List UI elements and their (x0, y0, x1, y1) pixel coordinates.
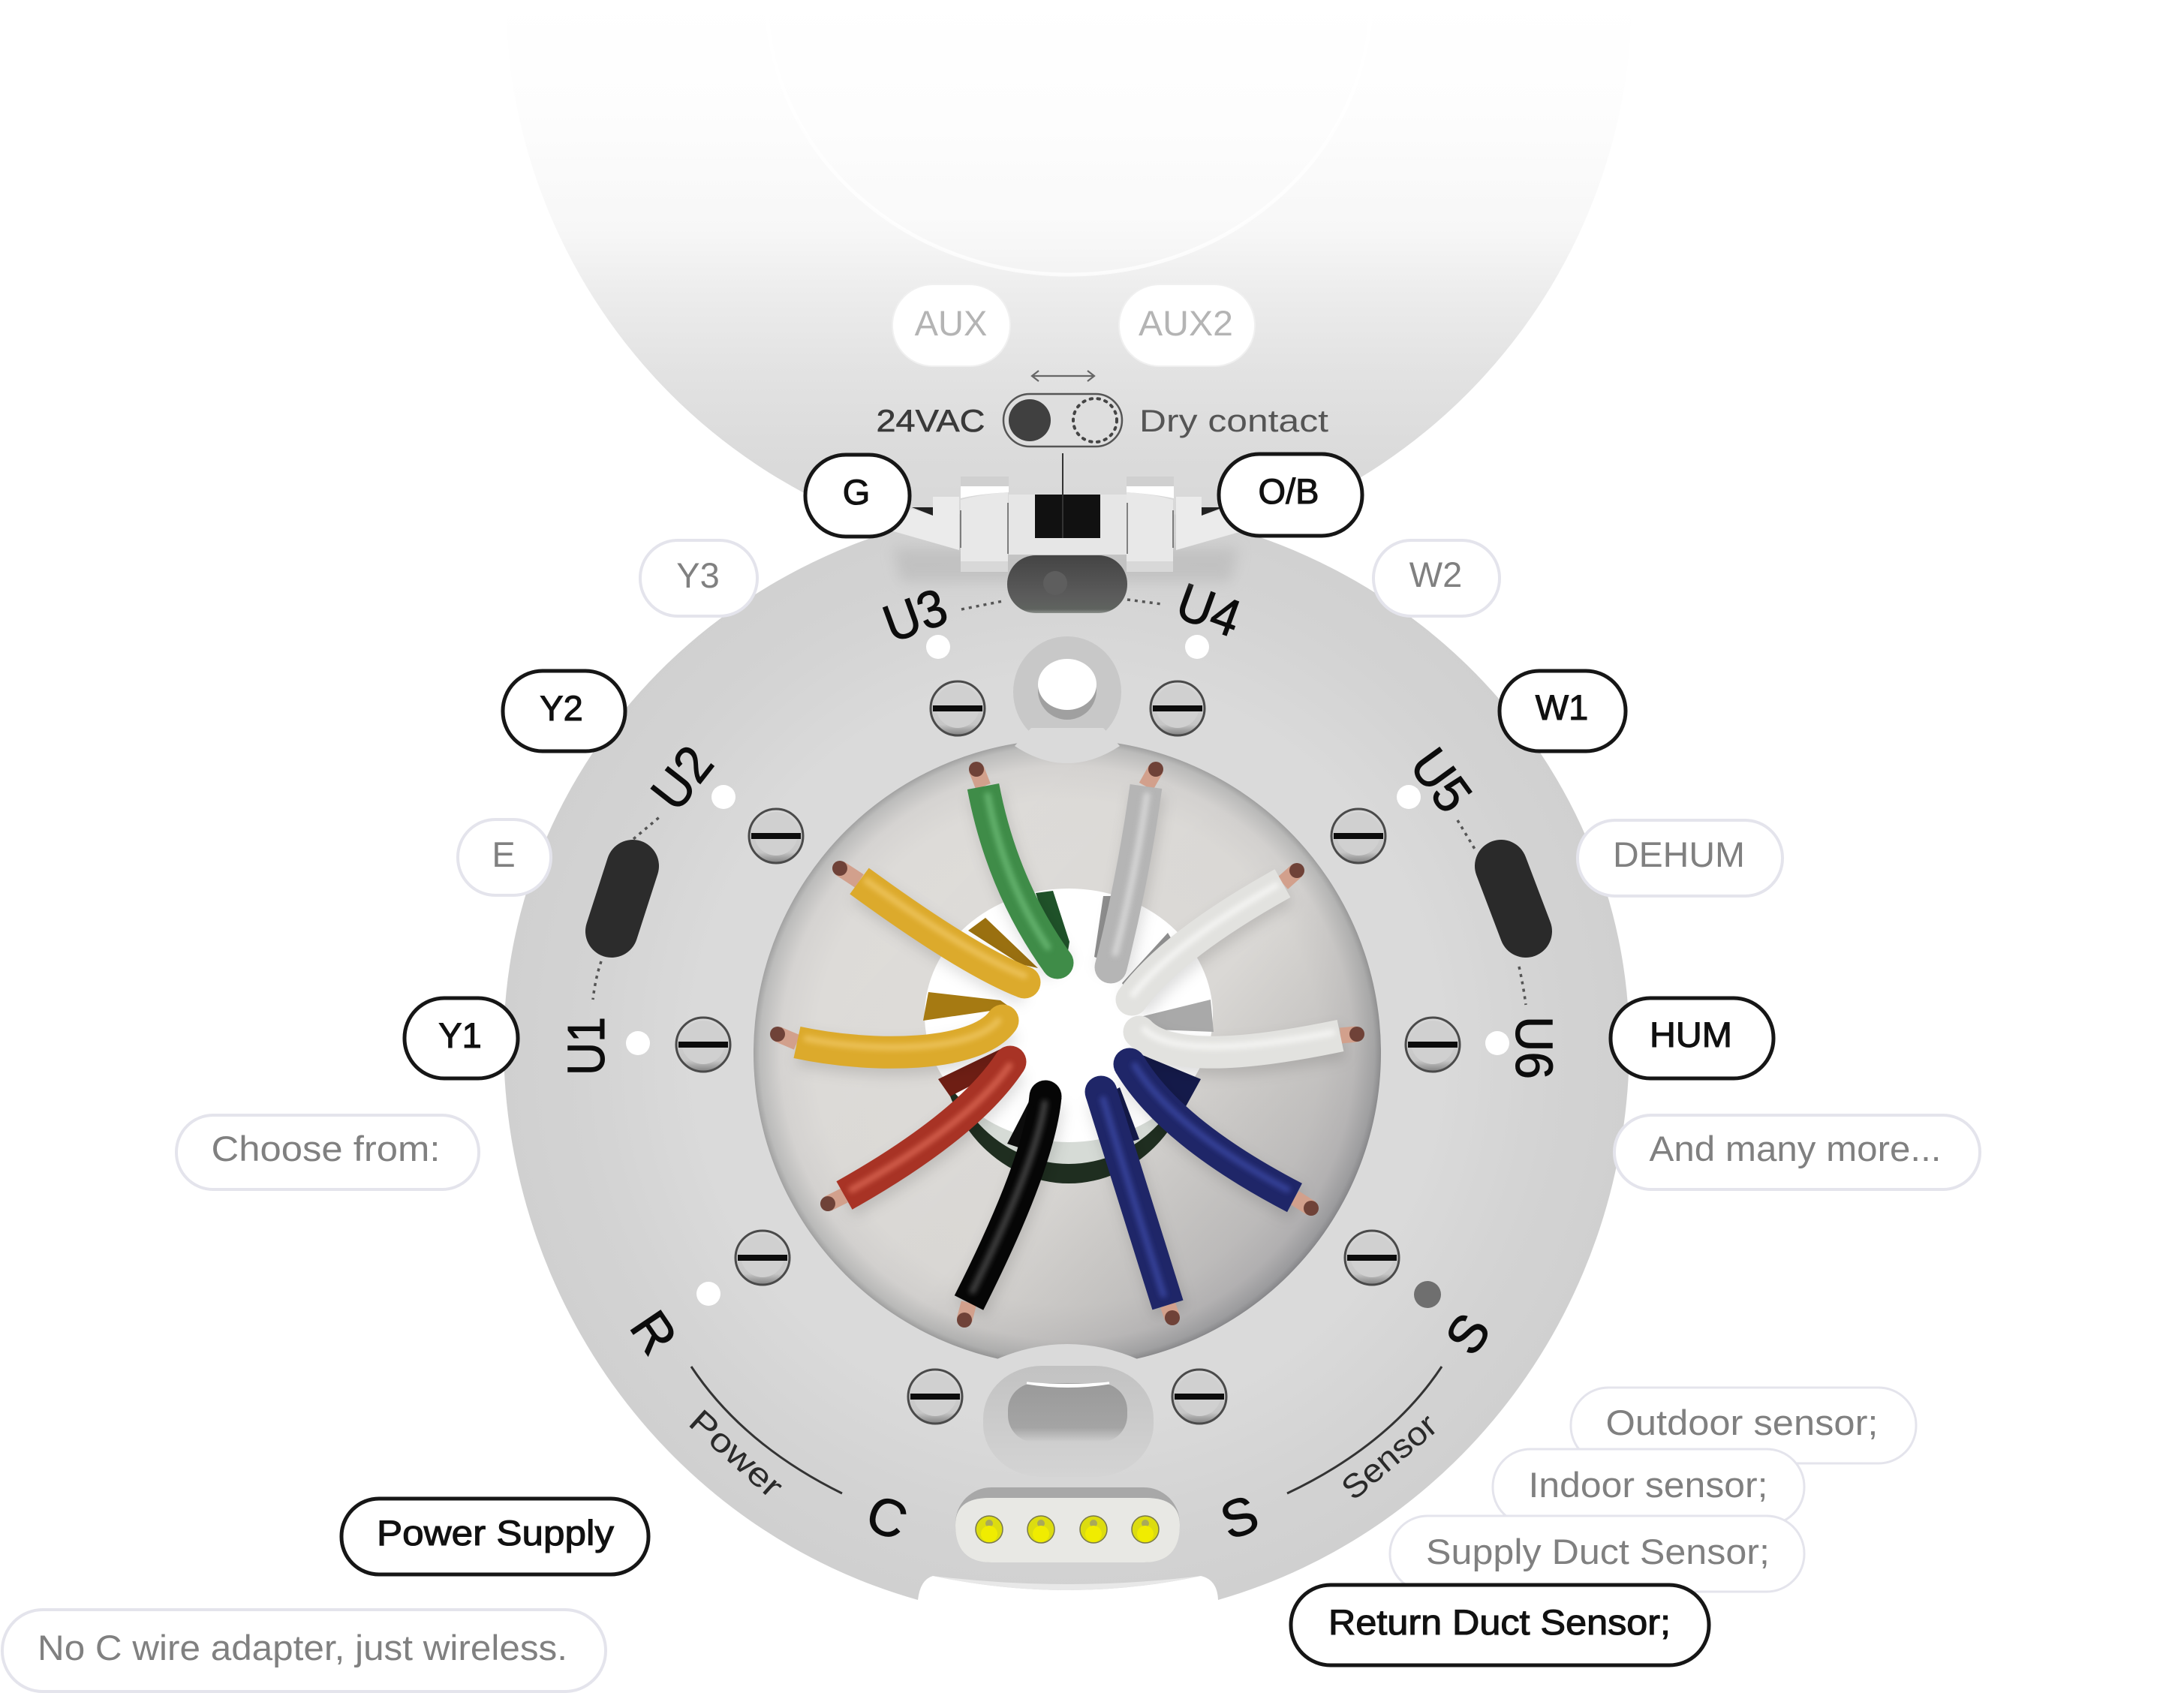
dark latch slot (1007, 555, 1127, 613)
pill AUX (892, 284, 1010, 366)
barrel seams (961, 503, 1173, 554)
pill DEHUM: DEHUM (1613, 834, 1745, 874)
pill And many more (1614, 1115, 1980, 1189)
pill Y3: Y3 (676, 555, 720, 595)
pill W1 (1500, 671, 1626, 751)
terminal indicator dots (626, 635, 1509, 1308)
pill E (458, 819, 551, 895)
left slot (961, 477, 1009, 487)
wire cavity (754, 739, 1381, 1367)
right arm (1176, 497, 1250, 550)
sensor group label: Sensor (1334, 1406, 1445, 1507)
hinge assembly (886, 453, 1250, 613)
pill Choose from: Choose from: (212, 1129, 440, 1168)
pill Y3 (640, 540, 757, 616)
wire stubs behind the opening (923, 891, 1214, 1148)
terminal labels on plate: U3 (876, 577, 955, 654)
pill Indoor sensor (1493, 1449, 1804, 1525)
central opening (925, 889, 1213, 1142)
wire shadows (799, 793, 1343, 1312)
wire: white lower (1123, 1016, 1340, 1052)
pill E: E (492, 834, 516, 874)
pill AUX: AUX (915, 303, 987, 343)
top notch (1015, 746, 1120, 763)
wire: yellow upper (859, 881, 1040, 998)
copper wire tips (778, 769, 1357, 1320)
wire: green (983, 786, 1073, 979)
pill Return Duct Sensor: Return Duct Sensor; (1328, 1602, 1671, 1642)
wire: black (969, 1081, 1061, 1303)
gold pins (976, 1516, 1159, 1543)
wire: white upper (1115, 883, 1283, 1016)
pill Y1 (405, 998, 518, 1078)
pill Choose from (176, 1115, 479, 1189)
bottom mount boss (983, 1344, 1154, 1477)
pill Indoor sensor: Indoor sensor; (1528, 1465, 1768, 1505)
plate bottom light edge (933, 1576, 1201, 1590)
terminal labels on plate: U5 (1399, 738, 1483, 822)
pill Supply Duct Sensor (1390, 1516, 1804, 1592)
black window (1035, 495, 1100, 538)
wire: yellow lower (797, 1004, 1019, 1052)
wire: navy right (1114, 1048, 1295, 1198)
left barrel (961, 492, 1008, 572)
left arm (886, 497, 959, 550)
pill HUM: HUM (1650, 1015, 1732, 1054)
back plate (504, 504, 1629, 1600)
pill Outdoor sensor: Outdoor sensor; (1606, 1403, 1878, 1442)
label 24VAC: 24VAC (877, 403, 985, 438)
toggle (1003, 394, 1122, 447)
pill DEHUM (1578, 820, 1782, 896)
pill Power Supply (341, 1499, 648, 1574)
mode switch (877, 371, 1328, 447)
terminal labels on plate: U2 (639, 735, 724, 821)
pill No C wire adapter: No C wire adapter, just wireless. (38, 1628, 567, 1667)
arrow (1032, 371, 1094, 381)
open lid of thermostat (506, 0, 1632, 559)
boss slot (1008, 1383, 1127, 1442)
group arcs (691, 1367, 1442, 1493)
power group label: Power (682, 1403, 790, 1505)
central opening rim (940, 895, 1198, 1183)
terminal screws (676, 681, 1460, 1424)
pill AUX2: AUX2 (1139, 303, 1233, 343)
wire: grey (1094, 786, 1147, 983)
terminal labels on plate (557, 572, 1563, 1551)
dotted connector lines (593, 600, 1526, 1005)
pill Outdoor sensor (1571, 1388, 1916, 1463)
pill W2 (1373, 540, 1500, 616)
pill Supply Duct Sensor: Supply Duct Sensor; (1426, 1532, 1770, 1571)
left black slider (612, 866, 633, 931)
terminal labels on plate: S (1213, 1484, 1266, 1551)
terminal labels on plate: U6 (1505, 1016, 1563, 1079)
connector pad (955, 1487, 1180, 1562)
label dry contact: Dry contact (1139, 403, 1328, 438)
copper tip ends (770, 762, 1364, 1328)
pill HUM (1611, 998, 1773, 1078)
top mount boss (1013, 636, 1121, 763)
pill Return Duct Sensor (1291, 1585, 1709, 1665)
center barrel (1009, 495, 1127, 555)
pill And many more: And many more... (1650, 1129, 1941, 1168)
pill O/B (1219, 454, 1362, 536)
terminal labels on plate: S (1433, 1303, 1502, 1365)
right barrel (1127, 492, 1173, 572)
terminal labels on plate: U4 (1169, 572, 1248, 648)
pill Y1: Y1 (438, 1015, 482, 1055)
wire: red (844, 1046, 1027, 1195)
pill O/B: O/B (1259, 471, 1319, 511)
pill Y2: Y2 (540, 688, 583, 728)
pill AUX2 (1119, 284, 1255, 366)
terminal labels on plate: C (859, 1484, 915, 1551)
right slot (1127, 477, 1174, 487)
screw hole (1038, 659, 1097, 710)
pill Y2 (503, 671, 625, 751)
pill G (805, 455, 910, 537)
right black slider (1501, 866, 1526, 931)
lid inner ring (766, 0, 1371, 275)
terminal labels on plate: U1 (557, 1017, 615, 1075)
pill W1: W1 (1536, 687, 1588, 727)
pill No C wire adapter (2, 1610, 606, 1691)
indicator line (1062, 453, 1063, 538)
pill W2: W2 (1409, 555, 1462, 594)
hinge shadow (893, 548, 1238, 582)
pill G: G (843, 472, 870, 512)
pill Power Supply: Power Supply (377, 1513, 615, 1553)
wire: navy lower (1085, 1076, 1168, 1305)
terminal labels on plate: R (619, 1301, 689, 1364)
